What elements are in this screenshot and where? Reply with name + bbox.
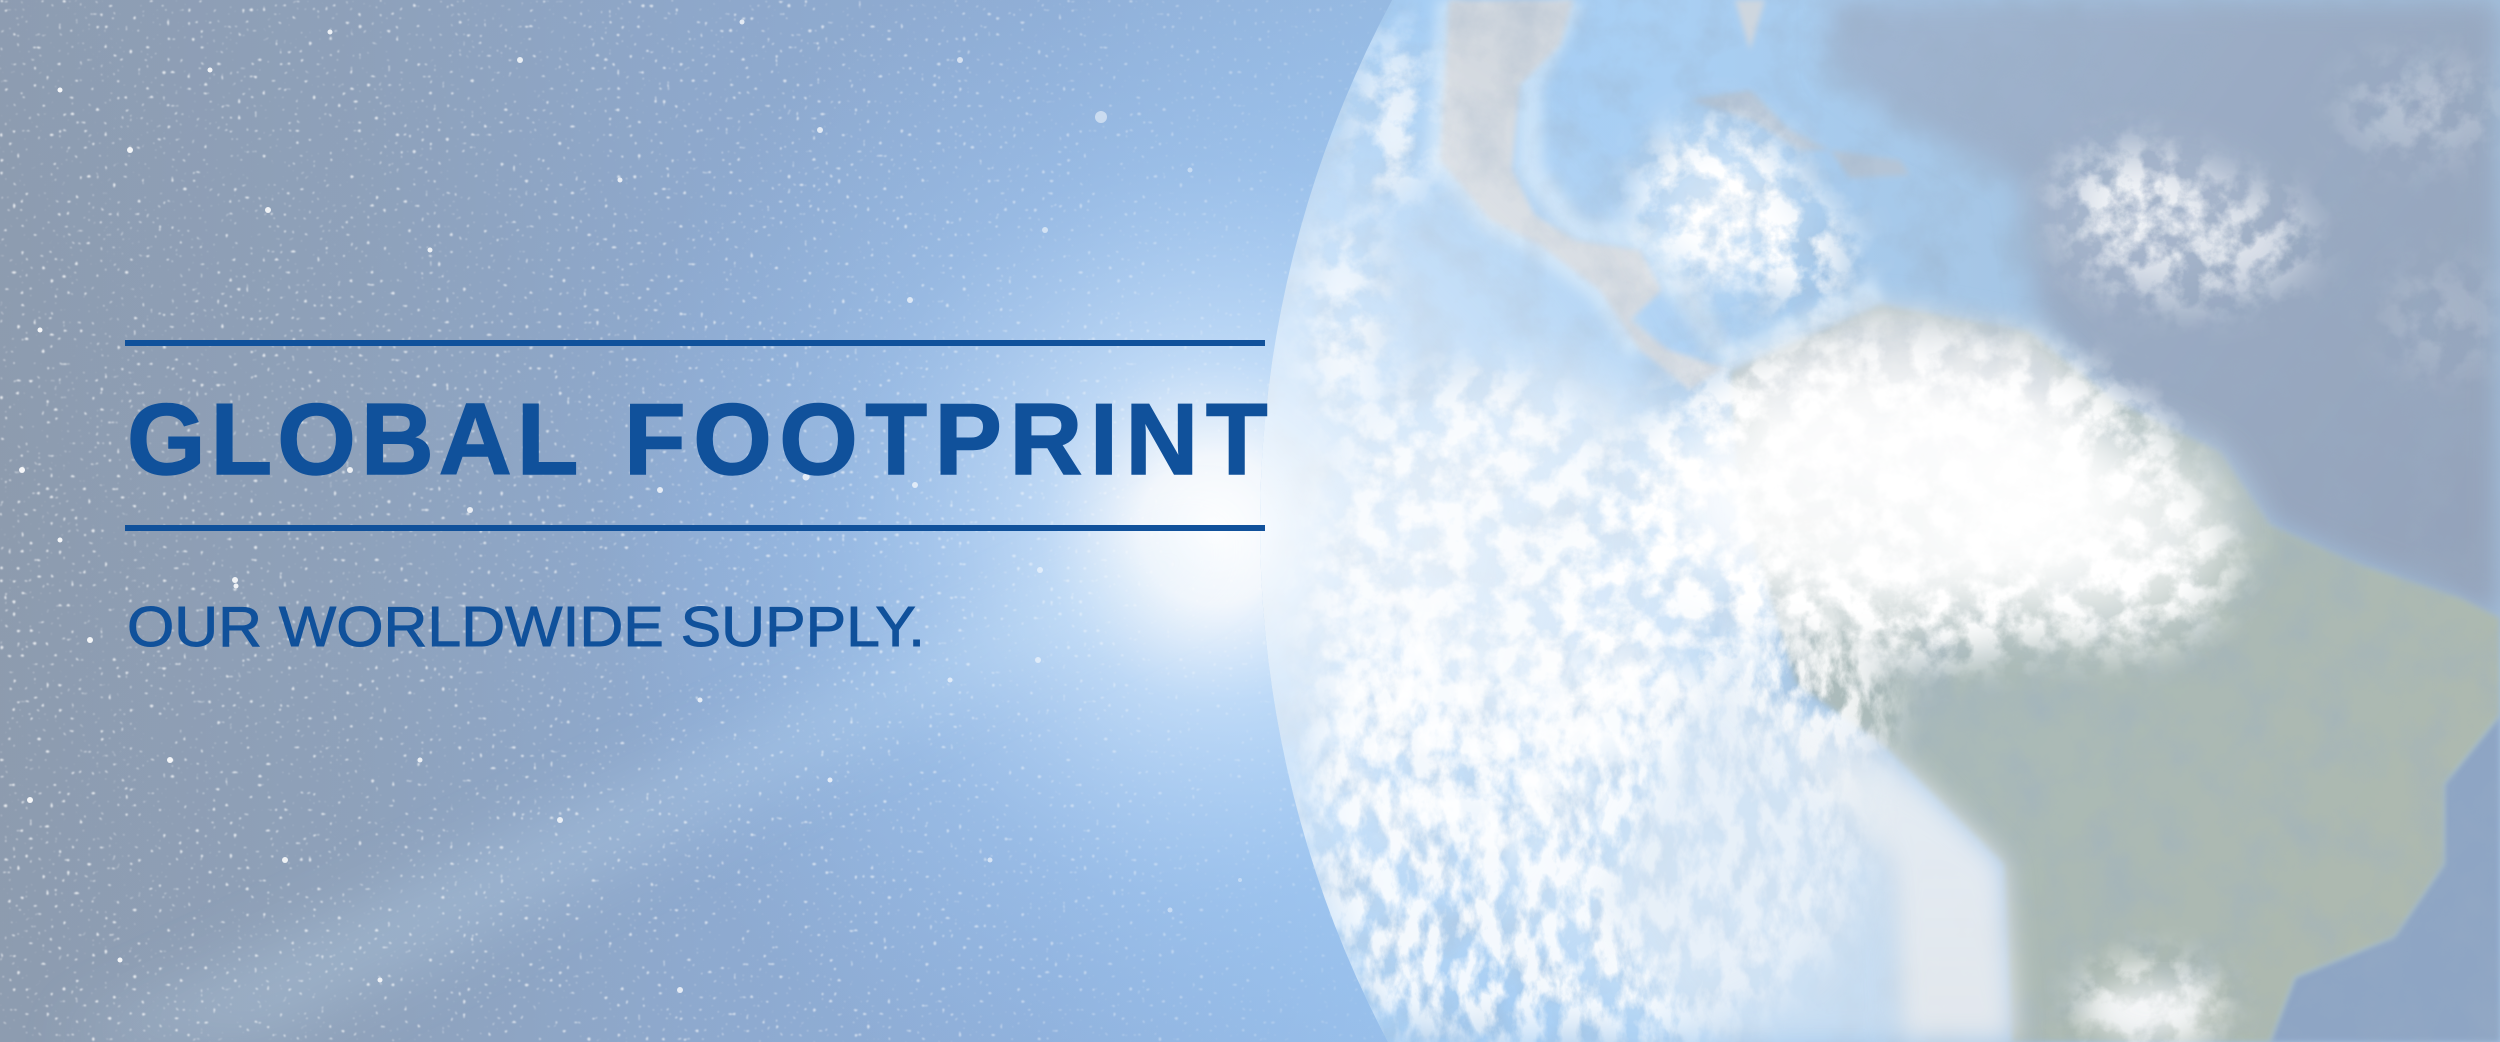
title rule, top xyxy=(125,340,1265,346)
andes mountains xyxy=(1714,664,2017,1042)
star field xyxy=(0,0,1400,1042)
light ray xyxy=(60,515,1215,1042)
atlantic ocean, upper right xyxy=(1830,0,2500,625)
surface texture xyxy=(1300,0,2500,1042)
textured clouds xyxy=(1310,30,2500,1041)
subtitle: OUR WORLDWIDE SUPPLY. xyxy=(127,595,925,659)
caribbean islands xyxy=(1690,0,1910,178)
south america landmass xyxy=(1730,305,2500,1042)
northern andes pale land xyxy=(1730,296,2098,426)
title rule, bottom xyxy=(125,525,1265,531)
small cloud bottom xyxy=(2090,980,2210,1040)
title: FOOTPRINT xyxy=(624,384,1275,496)
north and central america landmass xyxy=(1440,0,1725,390)
smooth cloud sheet over pacific xyxy=(1600,664,1897,1042)
limb glow xyxy=(1250,0,1810,1042)
coastal shelf glow xyxy=(1440,0,1880,360)
atlantic ocean, lower right xyxy=(2270,715,2500,1042)
lower cloud streaks xyxy=(1310,600,1890,1040)
pacific ocean xyxy=(1250,0,2500,1042)
broad soft cloud haze xyxy=(1380,140,2270,1020)
earth globe xyxy=(1250,0,2500,1042)
title: GLOBAL xyxy=(127,384,583,496)
